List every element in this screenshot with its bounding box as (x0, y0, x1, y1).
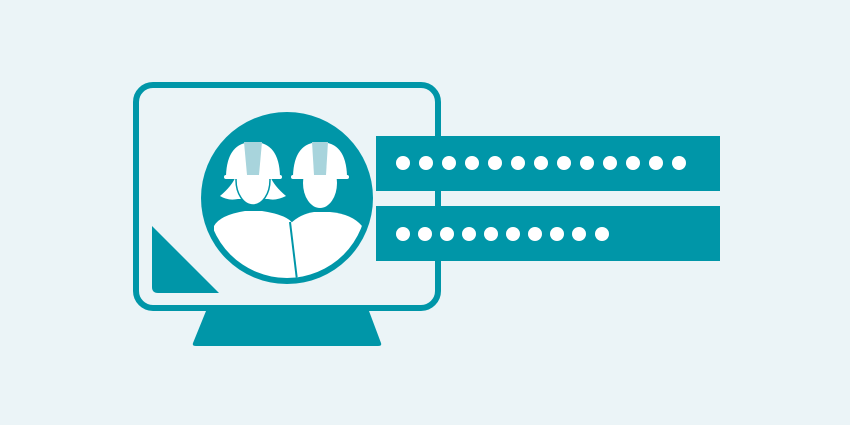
man worker (291, 142, 362, 278)
corner triangle (152, 226, 219, 293)
woman worker (214, 142, 300, 290)
password bar 1 (376, 136, 720, 191)
password bar 2 (376, 206, 720, 261)
monitor stand (193, 311, 381, 346)
monitor (136, 85, 438, 346)
avatar circle with workers (201, 112, 373, 290)
illustration (133, 82, 720, 346)
